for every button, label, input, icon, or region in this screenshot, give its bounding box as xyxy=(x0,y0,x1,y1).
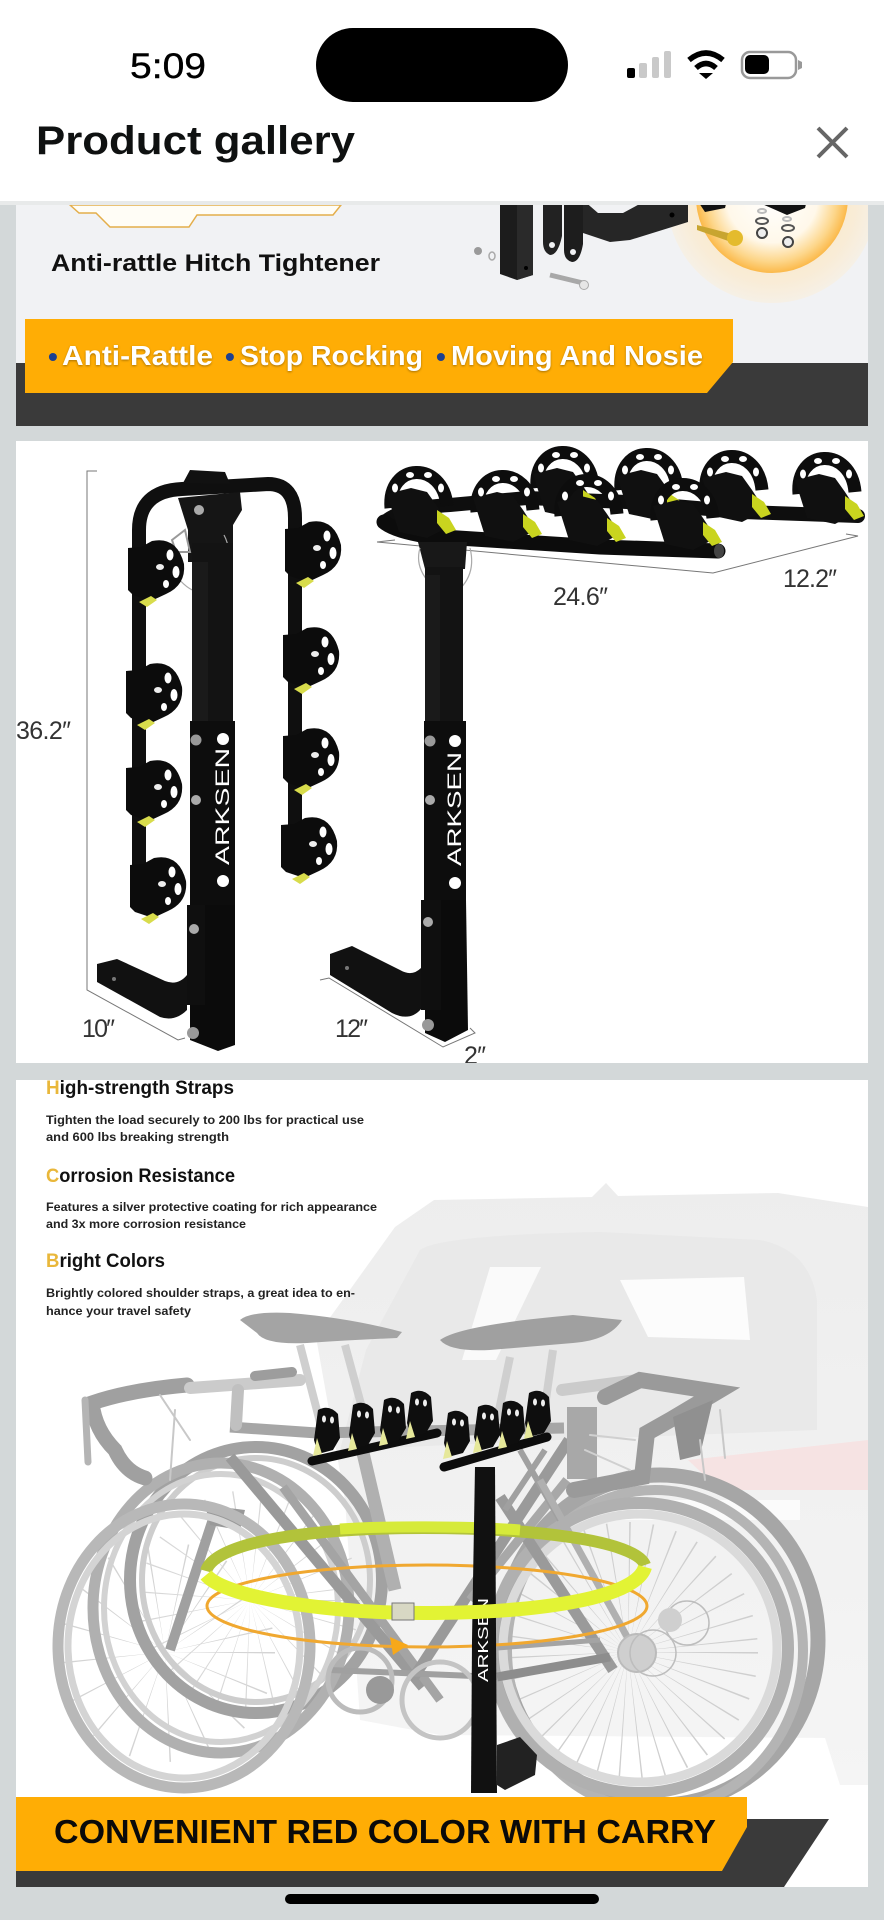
text: bright colors: Brightly colored shoulder straps, a great idea to en- xyxy=(46,1286,355,1300)
front tyre overlay xyxy=(58,1504,310,1788)
dark footer bar xyxy=(16,363,868,426)
panel: anti-rattle hitch tightener xyxy=(16,205,868,426)
yellow banner: • xyxy=(436,341,446,372)
header: status bar and gallery title xyxy=(0,0,884,205)
text: bright colors: hance your travel safety xyxy=(46,1304,191,1318)
brand: Arksen open view: ARKSEN xyxy=(445,752,466,866)
text: bright colors: Bright Colors xyxy=(46,1251,165,1272)
panel: straps with bikes on car xyxy=(16,1078,868,1887)
yellow banner: Anti-Rattle xyxy=(62,340,213,371)
panel: rack dimensions xyxy=(16,441,868,1070)
text: high-strength straps xyxy=(46,1078,364,1144)
text: corrosion resistance xyxy=(46,1166,377,1231)
spokes xyxy=(110,1545,693,1717)
bicycles xyxy=(58,1313,818,1810)
seat posts and saddles xyxy=(240,1313,622,1430)
yellow banner: Stop Rocking xyxy=(240,340,423,371)
label: width 2: 2″ xyxy=(464,1042,486,1070)
yellow banner: • xyxy=(48,341,58,372)
icon: glowing detail circle xyxy=(672,205,868,303)
text: bright colors xyxy=(46,1251,355,1318)
icon: hitch hardware xyxy=(474,200,807,290)
brand: Arksen on rack: ARKSEN xyxy=(475,1598,492,1682)
text: high-strength straps: High-strength Straps xyxy=(46,1078,234,1099)
yellow banner xyxy=(25,319,733,393)
strap back half xyxy=(206,1527,645,1571)
text: high-strength straps: Tighten the load securely to 200 lbs for practical use xyxy=(46,1113,364,1127)
label: depth 12.2: 12.2″ xyxy=(783,565,837,593)
label: depth 10: 10″ xyxy=(82,1015,115,1043)
icon: close xyxy=(818,128,847,157)
icon: orange arrow head xyxy=(390,1637,408,1655)
text: corrosion resistance: Features a silver protective coating for rich appearance xyxy=(46,1200,377,1214)
label: width 24.6: 24.6″ xyxy=(553,583,608,611)
frames xyxy=(170,1427,709,1738)
brand: Arksen side view: ARKSEN xyxy=(213,748,234,865)
hexagon callout outline xyxy=(70,205,341,227)
dynamic island xyxy=(316,28,568,102)
dark footer bar xyxy=(16,1819,829,1887)
wheels xyxy=(93,1447,818,1810)
yellow banner xyxy=(16,1797,747,1871)
orange rotation ring xyxy=(207,1565,647,1647)
icon: signal bars xyxy=(627,51,671,78)
yellow banner: Moving And Nosie xyxy=(451,340,703,371)
heading: anti-rattle hitch tightener: Anti-rattle Hitch Tightener xyxy=(51,250,380,277)
home indicator xyxy=(285,1894,599,1904)
label: height 36.2: 36.2″ xyxy=(16,717,71,745)
label: depth 12: 12″ xyxy=(335,1015,368,1043)
text: high-strength straps: and 600 lbs breaking strength xyxy=(46,1130,229,1144)
icon: battery xyxy=(742,52,802,78)
yellow banner: • xyxy=(225,341,235,372)
car silhouette xyxy=(316,1183,868,1785)
rack on car xyxy=(312,1391,551,1793)
text: corrosion resistance: and 3x more corrosion resistance xyxy=(46,1217,246,1231)
status time: 5:09 xyxy=(130,47,206,86)
open rack view xyxy=(330,452,864,1042)
text: corrosion resistance: Corrosion Resistance xyxy=(46,1166,235,1187)
folded rack side view xyxy=(97,470,341,1051)
title: Product gallery xyxy=(36,119,356,163)
yellow banner: CONVENIENT RED COLOR WITH CARRY xyxy=(54,1813,716,1850)
dimension lines xyxy=(87,471,858,1047)
handlebars xyxy=(85,1372,725,1490)
strap front half xyxy=(206,1567,645,1620)
icon: wifi xyxy=(689,53,723,79)
